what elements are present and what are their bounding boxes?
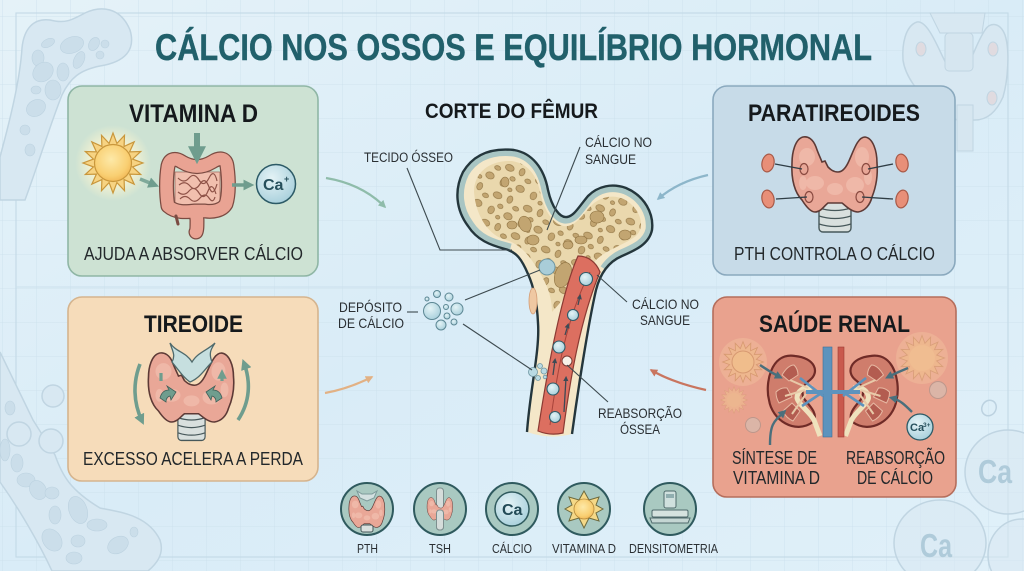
label: calcio no sangue right: CÁLCIO NO: [632, 296, 699, 312]
caption: sintese de vitamina D: [732, 447, 820, 488]
label: deposito de calcio: [338, 270, 540, 370]
large bone cavities: [501, 177, 631, 290]
icon: vitamina D: [558, 483, 610, 535]
calcium cluster at bone wall: [528, 364, 547, 380]
label: tecido osseo: [364, 150, 512, 250]
label: reabsorcao ossea: REABSORÇÃO: [598, 405, 682, 421]
femur outer shape: [457, 150, 652, 437]
heading: vitamina D: VITAMINA D: [129, 100, 258, 128]
caption: sintese de vitamina D: SÍNTESE DE: [732, 447, 817, 468]
arrow: intestine to calcium: [232, 183, 250, 187]
upward flow arrows: [553, 296, 580, 412]
icon: sun: [75, 125, 151, 201]
heading: paratireoides: PARATIREOIDES: [748, 100, 920, 127]
arrow: into intestine: [194, 133, 200, 157]
label: calcio no sangue top: SANGUE: [585, 151, 636, 167]
decorative thyroid: top right: [903, 13, 1008, 151]
resorption spot: [562, 356, 572, 366]
calcium spheres: [547, 272, 592, 422]
arrow: saude renal to femur: [651, 370, 706, 390]
label: calcio no sangue top: CÁLCIO NO: [585, 134, 652, 150]
label: vitamina D: VITAMINA D: [552, 542, 616, 556]
icon: calcium deposit bubbles: [424, 290, 463, 330]
label: calcio no sangue right: [597, 275, 699, 328]
icon: intestine: [166, 159, 228, 232]
panel: tireoide: [68, 297, 318, 481]
decorative bone: top left: [0, 9, 132, 200]
arrow: paratireoides to femur: [658, 175, 708, 199]
decorative calcium cells: bottom right: [894, 398, 1024, 571]
diagram: femur cross-section: [457, 150, 652, 437]
spongy bone: [474, 161, 641, 312]
caption: reabsorcao de calcio: [846, 447, 945, 488]
arrow: sun to intestine: [140, 179, 155, 185]
icon: PTH: [341, 483, 393, 535]
icon row: exams: [341, 483, 719, 556]
faded suns and calcium markers: [719, 332, 948, 432]
caption: reabsorcao de calcio: DE CÁLCIO: [857, 467, 933, 488]
icon: calcio: Ca: [502, 502, 523, 519]
arrow: down left: [135, 364, 142, 421]
icon: TSH: [414, 483, 466, 535]
heading: corte do femur: CORTE DO FÊMUR: [425, 98, 598, 123]
icon: calcium ball: 3+: [923, 422, 931, 429]
callus: [529, 288, 537, 314]
heading: tireoide: TIREOIDE: [144, 311, 243, 338]
arrow: up right: [238, 363, 248, 420]
label: calcio no sangue top: [547, 134, 652, 230]
icon: calcium ball: Ca: [263, 177, 284, 194]
decorative calcium cells: bottom right: Ca: [978, 453, 1013, 490]
label: calcio: CÁLCIO: [492, 541, 532, 556]
icon: thyroid with parathyroids: [760, 137, 910, 232]
label: PTH: PTH: [357, 542, 378, 556]
title: CÁLCIO NOS OSSOS E EQUILÍBRIO HORMONAL: [155, 27, 872, 68]
cortical band: [457, 150, 652, 270]
caption: sintese de vitamina D: VITAMINA D: [733, 467, 820, 488]
icon: calcium ball: [256, 164, 296, 204]
label: calcio no sangue right: SANGUE: [640, 312, 690, 328]
label: tecido osseo: TECIDO ÓSSEO: [364, 150, 453, 165]
icon: calcium ball: [907, 414, 933, 440]
arrow: calcium to right kidney: [892, 398, 912, 412]
decorative bone: bottom left: [0, 352, 161, 571]
icon: thyroid gland: [148, 343, 234, 440]
caption: vitamina D: AJUDA A ABSORVER CÁLCIO: [84, 243, 303, 264]
caption: paratireoides: PTH CONTROLA O CÁLCIO: [734, 243, 935, 264]
arrow: tireoide to femur: [325, 377, 372, 393]
caption: tireoide: EXCESSO ACELERA A PERDA: [83, 448, 304, 469]
arrow: vitamina D to femur: [326, 178, 385, 207]
icon: calcium ball: +: [284, 174, 289, 184]
panel: saude renal: [713, 297, 956, 497]
decorative calcium cells: bottom right: Ca: [920, 527, 952, 564]
icon: calcio: [486, 483, 538, 535]
icon: densitometria: [644, 483, 696, 535]
icon: kidneys: [768, 347, 898, 437]
panel: paratireoides: [713, 86, 955, 275]
label: TSH: TSH: [429, 542, 451, 556]
label: deposito de calcio: DEPÓSITO: [339, 299, 402, 315]
arrow: sun to right kidney: [888, 368, 908, 377]
label: deposito de calcio: DE CÁLCIO: [338, 315, 404, 331]
calcium deposit in neck: [539, 259, 555, 275]
marrow canal: [538, 256, 600, 434]
heading: saude renal: SAÚDE RENAL: [759, 310, 910, 338]
caption: reabsorcao de calcio: REABSORÇÃO: [846, 447, 945, 468]
icon: calcium ball: Ca: [910, 422, 925, 434]
arrow: synthesis label to kidney: [770, 412, 784, 445]
label: reabsorcao ossea: ÓSSEA: [620, 421, 661, 437]
arrow: sun to left kidney: [760, 365, 780, 377]
panel: vitamina D: [68, 86, 318, 276]
label: densitometria: DENSITOMETRIA: [629, 542, 719, 556]
label: reabsorcao ossea: [567, 365, 682, 437]
